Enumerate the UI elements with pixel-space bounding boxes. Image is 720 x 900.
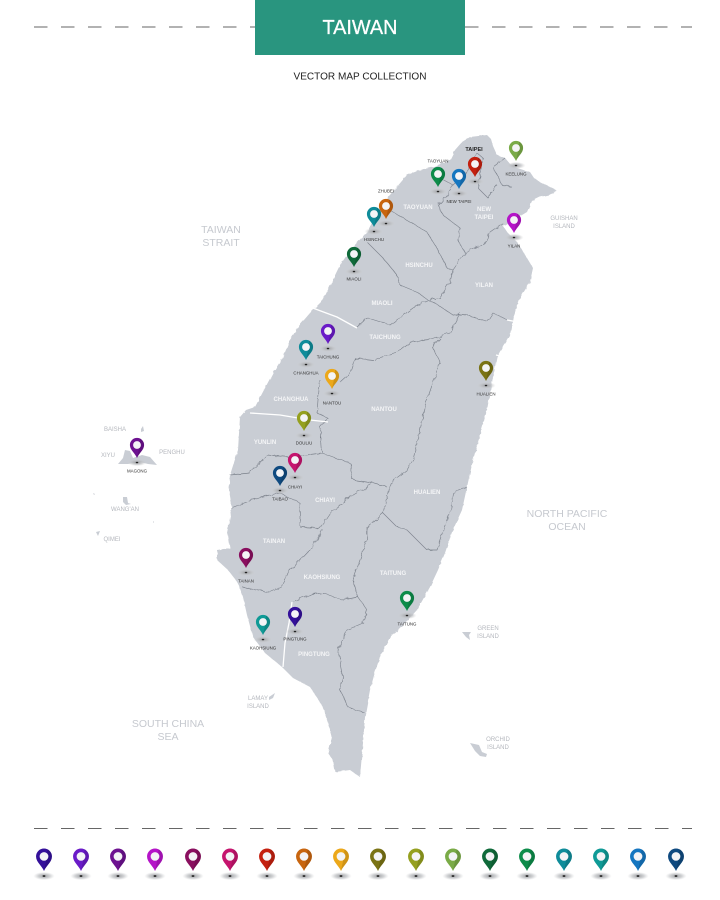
sea and island labels: ISLAND bbox=[487, 745, 509, 751]
sea and island labels: OCEAN bbox=[548, 521, 586, 533]
pin: Kaohsiung bbox=[250, 615, 277, 650]
map of Taiwan bbox=[93, 135, 556, 777]
region borders bbox=[230, 153, 512, 713]
county labels: TAIPEI bbox=[475, 215, 494, 221]
pin: Taoyuan: TAOYUAN bbox=[428, 158, 448, 164]
sea and island labels: ISLAND bbox=[247, 704, 269, 710]
county labels: NANTOU bbox=[371, 407, 397, 413]
pin: New Taipei: NEW TAIPEI bbox=[447, 199, 471, 204]
pin: Magong bbox=[127, 438, 148, 474]
county labels: YILAN bbox=[475, 283, 493, 289]
pin: Keelung: KEELUNG bbox=[506, 172, 527, 176]
pin: Hsinchu: HSINCHU bbox=[364, 237, 384, 242]
top dashed line bbox=[34, 26, 692, 28]
county labels: TAINAN bbox=[263, 539, 285, 545]
pin: Magong: MAGONG bbox=[127, 468, 148, 474]
pin: Chiayi: CHIAYI bbox=[288, 484, 302, 490]
pin: Taichung: TAICHUNG bbox=[317, 354, 340, 360]
pin: Taichung bbox=[317, 324, 340, 360]
rivers bbox=[310, 307, 357, 328]
pin: Taoyuan bbox=[428, 158, 448, 195]
sea and island labels bbox=[101, 216, 608, 751]
pin: Tainan bbox=[236, 548, 256, 584]
sea and island labels: SEA bbox=[157, 731, 179, 743]
sea and island labels: GUISHAN bbox=[550, 216, 578, 222]
sea and island labels: ISLAND bbox=[553, 224, 575, 230]
pin: Pingtung bbox=[283, 607, 307, 642]
pin: Kaohsiung: KAOHSIUNG bbox=[250, 646, 277, 650]
pin colour legend bbox=[33, 848, 687, 880]
sea and island labels: XIYU bbox=[101, 453, 115, 459]
pin: Miaoli: MIAOLI bbox=[347, 276, 361, 282]
pin: Yilan: YILAN bbox=[508, 244, 520, 248]
county labels: KAOHSIUNG bbox=[304, 575, 341, 581]
sea and island labels: TAIWAN bbox=[201, 224, 241, 236]
sea and island labels: STRAIT bbox=[202, 237, 240, 249]
county labels: TAOYUAN bbox=[403, 205, 433, 211]
sea and island labels: WANG'AN bbox=[111, 507, 139, 513]
county labels: PINGTUNG bbox=[298, 652, 330, 658]
bottom dashed line bbox=[34, 828, 692, 830]
pin: Zhubei bbox=[376, 188, 396, 227]
county labels: TAITUNG bbox=[380, 571, 406, 577]
sea and island labels: BAISHA bbox=[104, 427, 126, 433]
pin: Hsinchu bbox=[364, 207, 384, 242]
pin: Miaoli bbox=[344, 247, 364, 282]
county labels: TAICHUNG bbox=[369, 335, 401, 341]
sea and island labels: ISLAND bbox=[477, 634, 499, 640]
pin: Keelung bbox=[506, 141, 527, 176]
county labels: HSINCHU bbox=[405, 263, 433, 269]
pin: Pingtung: PINGTUNG bbox=[283, 636, 307, 642]
county labels: CHANGHUA bbox=[274, 397, 309, 403]
sea and island labels: PENGHU bbox=[159, 450, 185, 456]
title banner: TAIWAN bbox=[322, 17, 398, 39]
pin: Taipei: TAIPEI bbox=[465, 147, 483, 153]
pin: Douliu bbox=[294, 411, 314, 446]
pin: Hualien: HUALIEN bbox=[476, 392, 496, 396]
pin: Nantou: NANTOU bbox=[323, 400, 341, 406]
outlying islands bbox=[93, 426, 487, 757]
pin: Chiayi bbox=[286, 453, 304, 490]
sea and island labels: SOUTH CHINA bbox=[132, 718, 204, 730]
pin: Douliu: DOULIU bbox=[296, 440, 312, 446]
county labels: CHIAYI bbox=[315, 498, 335, 504]
pin: Tainan: TAINAN bbox=[238, 578, 254, 584]
pin: Changhua bbox=[293, 340, 319, 376]
county labels bbox=[254, 205, 494, 658]
sea and island labels: ORCHID bbox=[486, 737, 510, 743]
pin: Changhua: CHANGHUA bbox=[293, 370, 319, 376]
pin: Yilan bbox=[504, 213, 524, 248]
pin: Hualien bbox=[476, 361, 496, 396]
pin: Zhubei: ZHUBEI bbox=[378, 188, 394, 194]
sea and island labels: NORTH PACIFIC bbox=[527, 508, 608, 520]
pin: Taitung: TAITUNG bbox=[398, 622, 417, 626]
title banner bbox=[255, 0, 465, 55]
pin: Taibao: TAIBAO bbox=[272, 496, 288, 502]
sea and island labels: QIMEI bbox=[103, 537, 121, 543]
county labels: MIAOLI bbox=[372, 301, 393, 307]
county labels: YUNLIN bbox=[254, 440, 276, 446]
island outline bbox=[217, 135, 556, 777]
pin: Taipei bbox=[465, 147, 484, 185]
county labels: HUALIEN bbox=[414, 490, 440, 496]
city pins bbox=[127, 141, 527, 650]
sea and island labels: GREEN bbox=[477, 626, 499, 632]
pin: Taitung bbox=[398, 591, 417, 626]
pin: New Taipei bbox=[447, 169, 471, 204]
sea and island labels: LAMAY bbox=[248, 696, 268, 702]
pin: Nantou bbox=[322, 369, 342, 406]
pin: Taibao bbox=[270, 466, 290, 502]
subtitle: VECTOR MAP COLLECTION bbox=[294, 70, 426, 82]
county labels: NEW bbox=[477, 207, 491, 213]
